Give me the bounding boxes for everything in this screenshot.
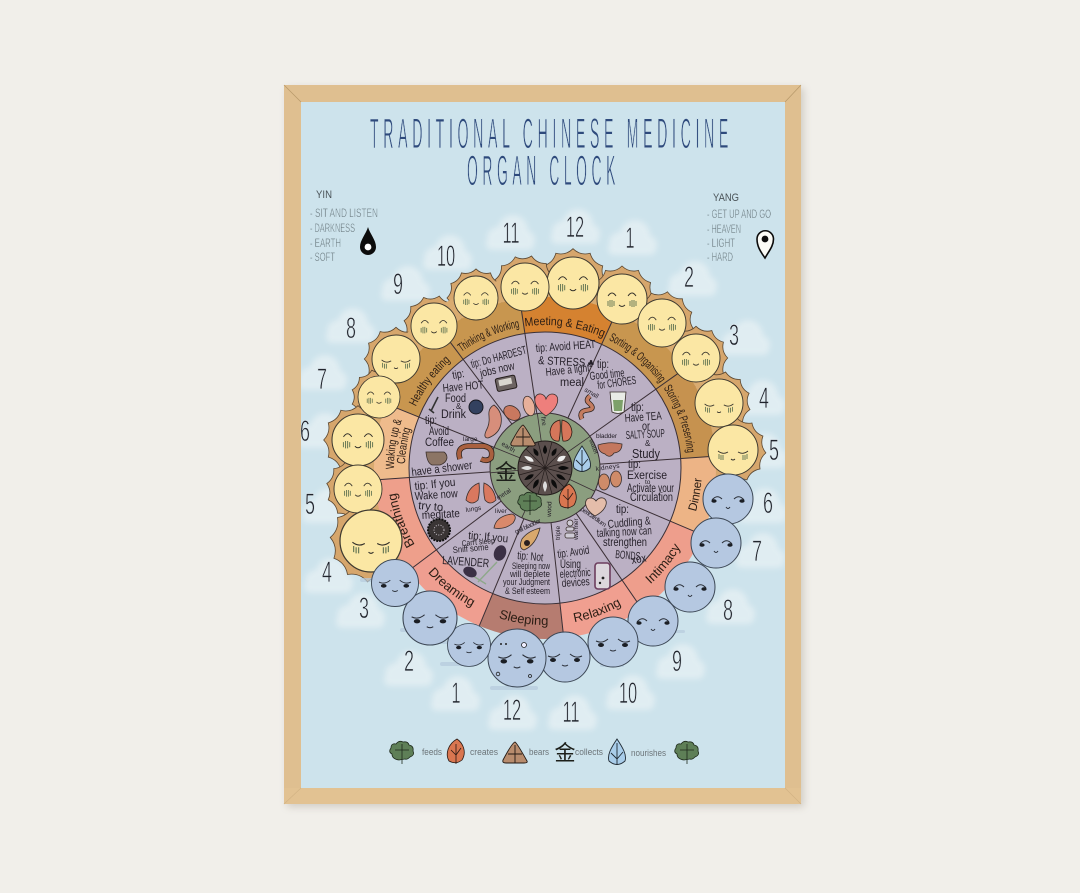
moon 11 [540, 632, 590, 682]
yin list: - SIT AND LISTEN [310, 206, 378, 220]
band labels: Cleaning [396, 428, 412, 464]
sun 2 [638, 299, 686, 347]
sector: dreaming tip with lavender: LAVENDER [442, 553, 490, 570]
sector: breathing tip [414, 477, 496, 541]
legend: 金 [554, 737, 576, 767]
sector: storing tip: Study [632, 446, 660, 461]
hour numbers: 1 [451, 677, 461, 710]
moon 6 [703, 474, 753, 524]
band labels: Dreaming [428, 567, 474, 608]
element ring icons and labels: water [587, 437, 600, 456]
hour numbers: 5 [769, 435, 779, 467]
sun 6 [332, 414, 384, 466]
sector: breathing tip: lungs [465, 505, 482, 514]
element ring icons and labels: wood [546, 501, 554, 518]
sector: storing tip: bladder [596, 433, 618, 440]
hour numbers: 4 [759, 383, 769, 415]
icon: yang white pin [757, 231, 774, 258]
band segments [330, 253, 760, 683]
sector: thinking and working tip: tip: Do HARDEST [470, 345, 528, 371]
sector: intimacy tip: strengthen [603, 537, 647, 549]
band labels: Storing & Preserving [664, 384, 694, 453]
element ring icons and labels: earth [500, 441, 517, 455]
sector: breathing tip: meditate [422, 508, 460, 522]
hour numbers: 10 [437, 240, 455, 273]
hour numbers: 2 [684, 262, 694, 294]
band labels [386, 316, 702, 628]
sector: intimacy tip: tip: [616, 504, 629, 516]
hour numbers: 10 [619, 677, 637, 710]
sector: waking up tip: large [463, 436, 478, 443]
sector: dinner tip: to [645, 479, 651, 486]
sector: storing tip [596, 402, 665, 461]
hour numbers: 4 [322, 557, 332, 589]
moon 2 [403, 591, 457, 645]
legend: nourishes [631, 748, 666, 758]
sector: dinner tip: tip: [628, 459, 641, 471]
sector: meeting and eating tip: Have a light [545, 362, 591, 379]
hour numbers: 2 [404, 646, 414, 678]
hour numbers: 11 [562, 696, 580, 729]
sector: healthy eating tip: & [456, 402, 462, 411]
yang list: - GET UP AND GO [707, 207, 771, 221]
hour numbers: 3 [729, 320, 739, 352]
yin list: - DARKNESS [310, 221, 355, 235]
band labels: Healthy eating [408, 356, 451, 406]
spoke lines [374, 299, 716, 638]
sector: waking up tip: have a shower [411, 460, 473, 479]
sector: dinner tip: Circulation [630, 492, 673, 504]
sector: meeting and eating tip: meal [560, 377, 584, 389]
hour numbers: 3 [359, 593, 369, 625]
hour numbers: 12 [503, 694, 521, 727]
band labels: Breathing [390, 494, 414, 548]
moon 1 [448, 624, 490, 666]
sector: dreaming tip with lavender: Sniff some [452, 542, 489, 555]
hour numbers: 8 [346, 313, 356, 345]
legend: collects [575, 747, 603, 757]
sector: dinner tip: kidneys [595, 463, 621, 473]
hour numbers: 9 [393, 269, 403, 301]
yang list [707, 192, 771, 264]
sun 10 [454, 276, 498, 320]
yin list: - SOFT [310, 250, 335, 264]
band labels: Intimacy [645, 543, 681, 584]
sector: sleeping tip: tip: Not [517, 550, 544, 564]
yang list: YANG [713, 192, 739, 204]
sector: intimacy tip: talking now can [597, 525, 652, 540]
icon: yin black drop [360, 227, 376, 255]
moon 8 [665, 562, 715, 612]
yin list: YIN [316, 189, 332, 201]
framed poster scene [284, 84, 806, 810]
sector: breathing tip: tip: If you [414, 477, 456, 493]
sector: healthy eating tip: Drink [441, 409, 466, 421]
band labels: Thinking & Working [456, 320, 520, 351]
sector: intimacy tip [579, 498, 652, 567]
clouds [298, 209, 787, 730]
hour numbers: 11 [502, 217, 520, 250]
legend [390, 737, 699, 767]
clock dial [370, 281, 716, 639]
band labels: Dinner [688, 478, 702, 511]
sector: dreaming tip with lavender: tip: If you [468, 530, 509, 545]
sun 8 [372, 335, 420, 383]
yang list: - LIGHT [707, 236, 735, 250]
sector: intimacy tip: Cuddling & [607, 515, 651, 531]
sector: storing tip: or [642, 421, 650, 433]
poster paper [301, 102, 785, 788]
legend: feeds [422, 747, 442, 757]
sector: dinner tip: Activate your [627, 483, 674, 495]
sector: healthy eating tip [429, 368, 484, 421]
sector: healthy eating tip: tip: [451, 368, 465, 382]
sector: sleeping tip [503, 517, 550, 597]
sector: dreaming tip with lavender: Can't sleep [461, 536, 495, 548]
sector: waking up tip: Coffee [425, 437, 454, 449]
band labels: Sleeping [500, 610, 548, 628]
sector: dinner tip [595, 459, 674, 504]
sector: sleeping tip: will deplete [509, 569, 550, 580]
dark centre dial [518, 441, 572, 495]
sector: meeting and eating tip [535, 339, 596, 389]
band labels: Sorting & Organising [610, 333, 665, 384]
sector: healthy eating tip: Have HOT [442, 379, 484, 395]
sector: sleeping tip: gall bladder [514, 517, 543, 536]
moon shadow strokes [360, 578, 685, 690]
legend: bears [529, 747, 549, 757]
sector: intimacy tip: pericardium [579, 506, 607, 529]
band labels: Relaxing [574, 600, 622, 622]
sector: dinner tip: Exercise [627, 470, 667, 482]
hour numbers: 7 [317, 364, 327, 396]
sector: sorting tip: Good time [589, 367, 625, 383]
sun 9 [411, 303, 457, 349]
sector: relaxing tip: triple [555, 526, 562, 540]
sector: dreaming tip with lavender [442, 508, 515, 584]
hour numbers: 9 [672, 646, 682, 678]
hour numbers: 8 [723, 595, 733, 627]
purple organ disc [409, 332, 681, 604]
sector: meeting and eating tip: tip: Avoid HEAT [535, 339, 596, 355]
sector: thinking and working tip [470, 345, 528, 392]
sector: relaxing tip: devices [561, 576, 590, 590]
sector: relaxing tip: electronic [559, 567, 591, 581]
sector: sleeping tip: your Judgment [503, 577, 550, 588]
legend: creates [470, 747, 498, 757]
sun 4 [340, 510, 402, 572]
sector: sleeping tip: Sleeping now [512, 561, 550, 572]
hour numbers: 5 [305, 489, 315, 521]
sector: intimacy tip: xox [630, 552, 647, 567]
sun 7 [358, 376, 400, 418]
sector: relaxing tip [555, 517, 610, 590]
moon 3 [372, 560, 418, 606]
moon 7 [691, 518, 741, 568]
sector: relaxing tip: Using [560, 559, 581, 571]
title: ORGAN CLOCK [467, 147, 620, 195]
sector: breathing tip: try to [418, 500, 444, 514]
sector: sorting tip: for CHORES [597, 375, 637, 392]
sector: storing tip: & [645, 439, 651, 448]
hour numbers: 12 [566, 211, 584, 244]
sector: intimacy tip: BONDS [615, 549, 641, 563]
sector: breathing tip: Wake now [414, 488, 459, 503]
sector: sorting tip [581, 359, 637, 419]
yang list: - HARD [707, 250, 733, 264]
hour numbers: 6 [763, 488, 773, 520]
sun 3 [672, 334, 720, 382]
sun 4 right [695, 379, 743, 427]
sun 12 [547, 257, 599, 309]
moon 10 [588, 617, 638, 667]
hour numbers [300, 211, 779, 729]
hour numbers: 7 [752, 536, 762, 568]
sector: sorting tip: tip: [597, 359, 609, 371]
hour numbers: 6 [300, 416, 310, 448]
sector: storing tip: Have TEA [624, 410, 662, 425]
sector: storing tip: tip: [631, 402, 644, 414]
sector: sorting tip: small [583, 387, 600, 401]
element ring dividers [490, 414, 595, 518]
sector: waking up tip [411, 415, 492, 479]
sector: sleeping tip: & Self esteem [505, 586, 550, 597]
sector: relaxing tip: tip: Avoid [557, 545, 590, 561]
band labels: Meeting & Eating [525, 316, 605, 339]
title [370, 110, 733, 195]
element ring icons and labels: metal [495, 487, 513, 502]
sun 1 [597, 274, 647, 324]
frame shadow [287, 88, 804, 807]
sun halos [321, 249, 769, 585]
yang list: - HEAVEN [707, 222, 741, 236]
sector: healthy eating tip: Food [445, 393, 466, 405]
element ring icons and labels: 金 [495, 455, 517, 487]
yin list [310, 189, 378, 264]
moon 9 [628, 596, 678, 646]
sector: meeting and eating tip: & STRESS ♣ [538, 355, 595, 370]
band labels: Waking up & [386, 420, 402, 469]
sector: waking up tip: tip: [425, 415, 437, 427]
sector: waking up tip: Avoid [429, 426, 449, 438]
wooden frame [284, 85, 801, 804]
sun 11 [501, 263, 549, 311]
hour numbers: 1 [625, 222, 635, 255]
moon 12 with craters [488, 629, 546, 687]
sun 5 right [708, 425, 758, 475]
element ring icons and labels: fire [539, 416, 547, 427]
element ring icons and labels [495, 416, 600, 518]
sector: storing tip: SALTY SOUP [626, 428, 665, 442]
tan backing behind the upper band [351, 274, 739, 662]
green element ring [490, 413, 600, 523]
sector: thinking and working tip: jobs now [478, 360, 516, 380]
sector: relaxing tip: warmer [573, 517, 580, 541]
organs: stomach spleen pancreas heart [485, 394, 558, 438]
sector: dreaming tip with lavender: liver [495, 508, 508, 515]
yin list: - EARTH [310, 236, 341, 250]
sun 5 [334, 465, 382, 513]
